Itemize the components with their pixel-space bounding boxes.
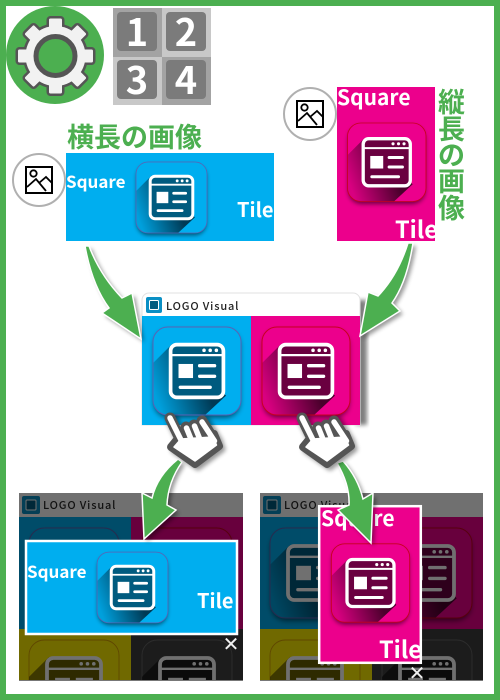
panel: dimmed app with portrait popup <box>260 493 483 700</box>
landscape popup tile <box>26 541 237 634</box>
panel: portrait pink tile <box>337 82 438 245</box>
panel: portrait pink tile: Square <box>337 82 411 112</box>
dimmed app background: LOGO Visual <box>43 497 116 513</box>
heading: portrait image (vertical): 像 <box>438 187 465 226</box>
landscape popup tile: Square <box>27 558 87 583</box>
panel: app window with two tiles <box>142 293 367 425</box>
icon: pointing hand right <box>302 418 354 467</box>
dimmed app background: LOGO Visual <box>284 497 357 513</box>
arrow: portrait image to app <box>360 243 416 339</box>
heading: portrait image (vertical): 画 <box>438 160 465 199</box>
app logo icon <box>146 297 162 313</box>
panel: landscape blue tile: Tile <box>237 194 274 223</box>
heading: portrait image (vertical): 縦 <box>438 81 465 120</box>
arrow: landscape image to app <box>85 246 144 342</box>
dimmed app background <box>260 493 483 700</box>
icon: numbered tile grid 1-4: 2 <box>175 2 197 57</box>
icon: settings gear <box>6 6 104 104</box>
icon: landscape picture badge <box>13 154 65 206</box>
blue tile <box>142 316 251 425</box>
close mark: ✕ <box>409 663 425 685</box>
arrow: pink tile to portrait popup <box>337 461 376 546</box>
portrait popup tile: Tile <box>379 631 422 665</box>
icon: numbered tile grid 1-4 <box>113 2 211 105</box>
heading: portrait image (vertical) <box>438 81 465 226</box>
panel: dimmed app with landscape popup <box>19 493 243 700</box>
icon: numbered tile grid 1-4: 3 <box>126 50 148 105</box>
portrait popup tile: Square <box>321 503 395 533</box>
heading: landscape image: 横長の画像 <box>67 116 202 155</box>
dimmed app background <box>19 493 243 700</box>
panel: landscape blue tile: Square <box>66 168 126 193</box>
heading: portrait image (vertical): 長 <box>438 108 465 147</box>
icon: numbered tile grid 1-4: 4 <box>175 50 197 105</box>
portrait popup tile <box>319 503 422 665</box>
app title: LOGO Visual <box>166 298 239 314</box>
icon: numbered tile grid 1-4: 1 <box>126 2 148 57</box>
arrow: blue tile to landscape popup <box>142 459 185 542</box>
panel: portrait pink tile: Tile <box>395 211 438 245</box>
landscape popup tile: Tile <box>197 585 234 614</box>
panel: landscape blue tile <box>66 153 274 241</box>
pink tile <box>251 316 360 425</box>
close mark: ✕ <box>223 634 239 656</box>
icon: pointing hand left <box>170 418 222 467</box>
icon: portrait picture badge <box>284 88 336 140</box>
heading: portrait image (vertical): の <box>438 134 465 173</box>
